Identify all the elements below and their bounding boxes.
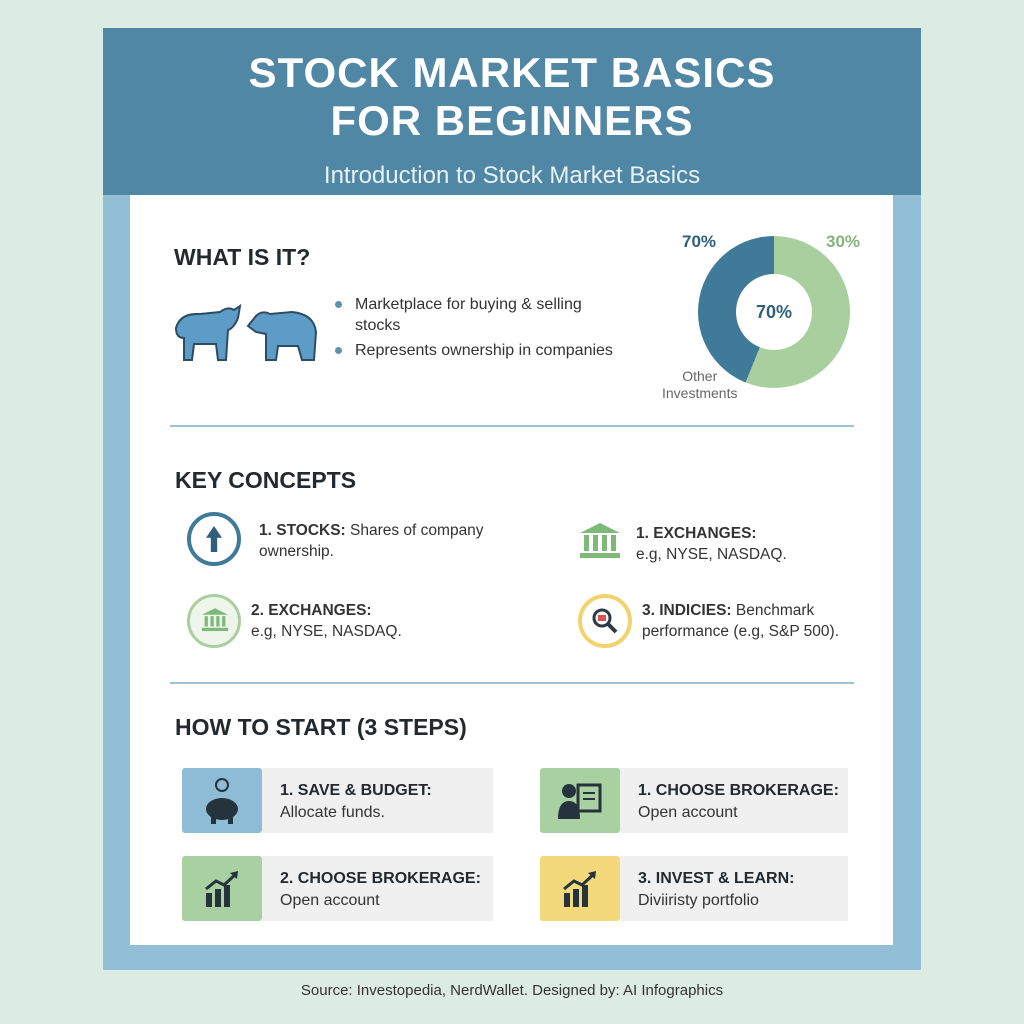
donut chart: 30%	[826, 232, 860, 251]
concept: exchanges (green bank)	[580, 523, 787, 563]
step: invest & learn	[540, 856, 848, 921]
step: choose brokerage: Open account	[638, 804, 738, 821]
header band	[103, 28, 921, 195]
donut chart: 70%	[682, 232, 716, 251]
step: choose brokerage 2: Open account	[280, 892, 380, 909]
step: choose brokerage 2	[182, 856, 493, 921]
step: choose brokerage 2: 2. CHOOSE BROKERAGE:	[280, 870, 481, 887]
concept: indices	[578, 594, 839, 648]
step: choose brokerage: 1. CHOOSE BROKERAGE:	[638, 782, 839, 799]
bullet list: Represents ownership in companies	[355, 342, 613, 359]
title: FOR BEGINNERS	[330, 97, 694, 144]
icon: bull and bear	[175, 304, 317, 361]
step: invest & learn: 3. INVEST & LEARN:	[638, 870, 794, 887]
step: choose brokerage	[540, 768, 848, 833]
step: save & budget	[182, 768, 493, 833]
step: save & budget: Allocate funds.	[280, 804, 385, 821]
heading: what is it: WHAT IS IT?	[174, 244, 310, 270]
bullet list	[335, 296, 613, 359]
concept: stocks: 1. STOCKS: Shares of company ownership.	[259, 522, 484, 560]
concept: exchanges 2: e.g, NYSE, NASDAQ.	[251, 623, 402, 640]
white panel	[130, 195, 893, 945]
donut chart	[662, 232, 860, 401]
title: STOCK MARKET BASICS	[249, 49, 775, 96]
title	[249, 49, 775, 144]
concept: exchanges (green bank): 1. EXCHANGES:	[636, 525, 757, 542]
donut chart: Other	[682, 368, 717, 384]
concept: exchanges 2	[187, 594, 402, 648]
step: save & budget: 1. SAVE & BUDGET:	[280, 782, 432, 799]
bullet list: Marketplace for buying & selling stocks	[355, 296, 582, 334]
concept: indices: performance (e.g, S&P 500).	[642, 623, 839, 640]
frame	[103, 28, 921, 970]
footer source: Source: Investopedia, NerdWallet. Designed by: AI Infographics	[301, 982, 723, 999]
heading: how to start: HOW TO START (3 STEPS)	[175, 714, 467, 740]
donut chart: 70%	[756, 302, 792, 322]
concept: stocks	[187, 512, 484, 566]
heading: key concepts: KEY CONCEPTS	[175, 467, 356, 493]
step: invest & learn: Diviiristy portfolio	[638, 892, 759, 909]
concept: exchanges (green bank): e.g, NYSE, NASDAQ.	[636, 546, 787, 563]
concept: indices: 3. INDICIES: Benchmark	[642, 602, 814, 619]
subtitle: Introduction to Stock Market Basics	[324, 162, 700, 189]
donut chart: Investments	[662, 385, 737, 401]
concept: exchanges 2: 2. EXCHANGES:	[251, 602, 372, 619]
